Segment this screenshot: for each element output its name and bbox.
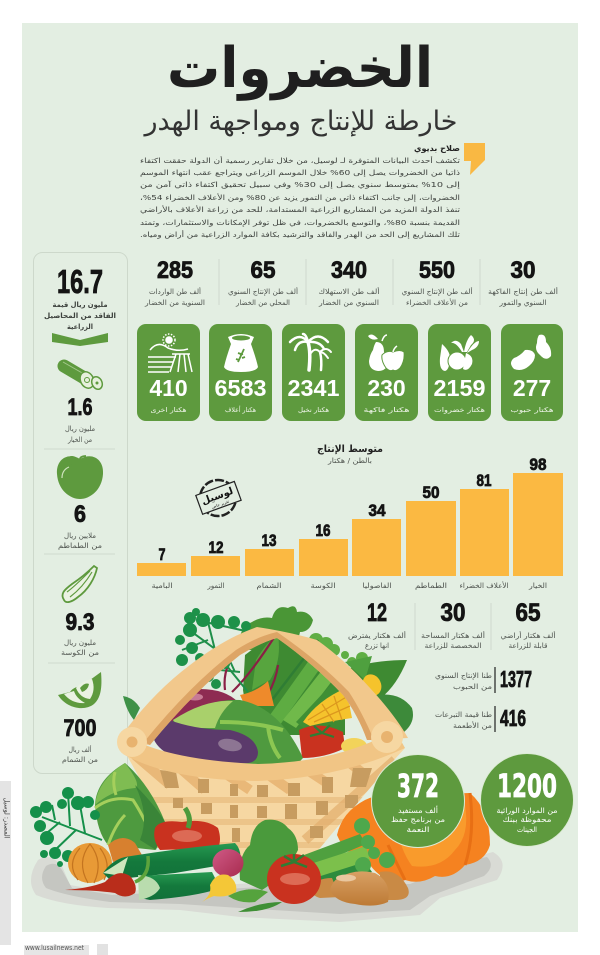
stat 30 land: ألف هكتار المساحة <box>421 631 485 640</box>
icon: melon slice <box>58 672 101 708</box>
stamp: Lusail logo <box>193 474 244 522</box>
body paragraph: الخضروات، إلى جانب اكتفاء ذاتي من التمور يزيد عن 80% ومن الأعلاف الخضراء 54%، <box>140 193 460 202</box>
card: fruit 230: هكتار فاكهة <box>364 406 410 414</box>
stat 6: ملايين ريال <box>64 532 96 540</box>
card: grains 277 <box>501 324 563 421</box>
bar labels: الطماطم <box>415 582 447 590</box>
celery <box>296 818 395 890</box>
icon: cucumber <box>63 362 104 391</box>
stat 30: ألف طن إنتاج الفاكهة <box>488 287 558 296</box>
bar values: 16 <box>316 521 330 540</box>
chart heading <box>317 444 383 465</box>
stat 65 land: 65 <box>516 599 541 627</box>
stat 340: 340 <box>331 257 367 284</box>
beet <box>167 689 238 725</box>
card: other 410 <box>137 324 200 421</box>
stamp: Lusail logo: تقرير خاص <box>211 499 230 510</box>
body paragraph: تلك المشاريع إلى الحد من الهدر والفاقد والترشيد بكافة الموارد الزراعية من أراض ومياه. <box>140 230 460 239</box>
card: palms 2341 <box>282 324 345 421</box>
callout: 372 beneficiaries: من برنامج حفظ <box>391 815 445 824</box>
chart heading: بالطن / هكتار <box>327 457 372 465</box>
callout: 372 beneficiaries: ألف مستفيد <box>398 805 438 815</box>
icon: zucchini <box>62 566 97 602</box>
chili <box>65 856 148 896</box>
byline: صلاح بديوي <box>414 144 460 153</box>
bar values: 7 <box>158 545 166 564</box>
bar labels: الكوسة <box>310 582 336 590</box>
intro text block <box>140 144 460 239</box>
card: palms 2341: 2341 <box>288 375 340 401</box>
icon: pear and apple <box>368 335 404 371</box>
stat 9.3: من الكوسة <box>61 649 99 657</box>
stat 9.3 <box>61 609 99 657</box>
front parsley <box>30 787 102 867</box>
total value 16.7: مليون ريال قيمة <box>52 301 108 309</box>
stat 30: 30 <box>510 257 536 284</box>
stat 9.3: 9.3 <box>66 609 94 636</box>
bar labels: الفاصوليا <box>362 582 392 590</box>
subtitle: خارطة للإنتاج ومواجهة الهدر <box>143 106 458 137</box>
stat 1.6: مليون ريال <box>65 425 95 433</box>
stat: 1377 grains: من الحبوب <box>453 683 492 691</box>
stat 340: ألف طن الاستهلاك <box>318 287 380 296</box>
basket body <box>125 748 405 860</box>
bar values: 81 <box>476 471 492 490</box>
pumpkin <box>337 793 490 882</box>
small left leaf <box>123 696 140 720</box>
second corn cob <box>359 671 385 699</box>
icon: tomato <box>57 456 103 499</box>
stat 30 <box>488 257 558 307</box>
right-hand leaves <box>345 656 413 732</box>
card: other 410: 410 <box>149 375 188 401</box>
stat: 1377 grains <box>435 666 532 693</box>
callout: 1200 genetic resources: 1200 <box>497 767 557 805</box>
stat 550: من الأعلاف الخضراء <box>406 298 468 307</box>
total value 16.7: الفاقد من المحاصيل <box>44 312 116 320</box>
icon: eggplant and turnip <box>440 335 479 371</box>
stamp: Lusail logo: لوسيل <box>200 486 235 507</box>
body paragraph: إلى 10% بمتوسط سنوي يصل إلى 30% وفي سبيل تحقيق اكتفاء ذاتي آمن من <box>140 180 460 189</box>
stat 1.6: 1.6 <box>68 394 92 421</box>
title: الخضروات <box>167 36 433 101</box>
card: fruit 230 <box>355 324 418 421</box>
bar labels: البامية <box>152 582 173 590</box>
stat 700: من الشمام <box>62 756 98 764</box>
callout: 1200 genetic resources: الجينات <box>517 825 537 834</box>
stat: 416 food donations: 416 <box>500 705 526 731</box>
cucumbers <box>103 843 240 900</box>
stat 1.6: من الخيار <box>67 436 92 444</box>
icon: orange quotation mark <box>464 143 485 175</box>
bar chart: average production <box>137 444 563 590</box>
basket rim <box>125 730 405 781</box>
stat 12 land <box>348 599 406 650</box>
onion <box>68 843 112 883</box>
basket hubs <box>117 721 403 757</box>
bar values: 98 <box>530 455 546 474</box>
bar values: 13 <box>262 531 276 550</box>
card: fruit 230: 230 <box>367 375 406 401</box>
bar values: 50 <box>422 483 440 502</box>
stat 12 land: 12 <box>367 599 387 627</box>
central greens <box>190 632 350 735</box>
stat 12 land: انها تزرع <box>365 642 389 650</box>
panel: crop value column <box>34 252 128 774</box>
basket tomato <box>299 725 345 758</box>
stat: 1377 grains: 1377 <box>500 666 532 692</box>
card: other 410: هكتار اخرى <box>150 406 187 414</box>
card: fodder 6583: هكتار أعلاف <box>225 405 257 414</box>
card: vegetables 2159: 2159 <box>434 375 486 401</box>
icon: farm <box>148 334 192 372</box>
total value 16.7: الزراعية <box>67 323 93 331</box>
footer website <box>24 944 108 955</box>
stat 9.3: مليون ريال <box>64 639 96 647</box>
stat 6 <box>58 501 102 550</box>
icon: palm trees <box>290 334 331 370</box>
stat 30 land: 30 <box>440 599 466 627</box>
bar labels: الأعلاف الخضراء <box>460 581 509 590</box>
stat 700 <box>62 715 98 764</box>
red pepper <box>154 808 220 850</box>
back lettuce <box>238 606 313 650</box>
stat 340: السنوي من الخضار <box>318 299 379 307</box>
icon: beans <box>511 335 551 370</box>
illustration: vegetable basket <box>30 606 503 922</box>
pea pods <box>228 889 282 912</box>
hectare cards row <box>137 324 563 421</box>
stat 65: ألف طن الإنتاج السنوي <box>228 287 298 296</box>
total value 16.7: 16.7 <box>57 263 103 300</box>
callout: 1200 genetic resources <box>480 754 574 846</box>
card: grains 277: 277 <box>513 375 551 401</box>
callout: 372 beneficiaries: 372 <box>397 767 439 805</box>
stat 65 land: قابلة للزراعة <box>508 642 548 650</box>
stat 550: ألف طن الإنتاج السنوي <box>402 287 473 296</box>
footer website: www.lusailnews.net <box>25 944 84 952</box>
stat 700: ألف ريال <box>68 745 92 754</box>
stat 550 <box>402 257 473 307</box>
stat 285 <box>144 257 205 307</box>
callout: 372 beneficiaries <box>372 754 464 848</box>
parsley in basket <box>175 608 251 672</box>
callout: 1200 genetic resources: من الموارد الوراثية <box>496 806 558 815</box>
card: vegetables 2159 <box>428 324 491 421</box>
stat 340 <box>318 257 380 307</box>
bars <box>137 473 563 576</box>
body paragraph: القديمة بنسبة 80%، والتوسع بالخضروات، في ظل توفر الإمكانات والاستثمارات، وتمتد <box>140 219 460 227</box>
bar values: 12 <box>208 538 224 557</box>
callout: 1200 genetic resources: محفوظة ببنك <box>502 815 552 824</box>
source strip <box>0 781 11 945</box>
front cabbage <box>95 763 165 850</box>
stat: 1377 grains: طنا الإنتاج السنوي <box>435 672 492 680</box>
orange root <box>108 838 142 862</box>
total value 16.7 <box>44 263 116 331</box>
stat 12 land: ألف هكتار يفترض <box>348 631 406 640</box>
stat: 416 food donations <box>435 705 526 732</box>
body paragraph: تنفذ الدولة المزيد من المشاريع الزراعية المستدامة، للحد من زراعة الأعلاف بالأراضي <box>140 205 460 214</box>
stat 285: 285 <box>157 257 193 284</box>
bar labels: التمور <box>207 582 225 590</box>
light-green parsley cluster <box>309 633 368 674</box>
basket handle <box>117 627 408 745</box>
bar labels <box>152 581 547 590</box>
radish <box>212 849 244 877</box>
carrot <box>240 681 274 706</box>
stat 6: 6 <box>74 501 86 528</box>
source strip: المصدر: لوسيل <box>2 798 10 839</box>
stat 285: ألف طن الواردات <box>149 287 201 296</box>
bar labels: الخيار <box>528 582 547 590</box>
bar values: 34 <box>368 501 386 520</box>
stat 1.6 <box>65 394 95 444</box>
top statistics row <box>144 257 558 307</box>
front lettuce <box>240 820 298 890</box>
cabbage in basket <box>173 700 303 772</box>
icon: sack <box>224 334 258 372</box>
card: vegetables 2159: هكتار خضروات <box>434 406 486 414</box>
stat 30: السنوي والتمور <box>498 299 547 307</box>
eggplant <box>152 712 258 763</box>
stat 65 land: ألف هكتار أراضي <box>500 631 556 640</box>
stat 700: 700 <box>64 715 96 742</box>
stat 285: السنوية من الخضار <box>144 299 205 307</box>
potatoes <box>312 871 409 906</box>
callout: 372 beneficiaries: النعمة <box>406 825 430 834</box>
stat 30 land <box>421 599 485 650</box>
card: palms 2341: هكتار نخيل <box>298 406 330 414</box>
stat: 416 food donations: من الأطعمة <box>453 721 492 730</box>
chart heading: متوسط الإنتاج <box>317 444 383 455</box>
bar labels: الشمام <box>256 582 282 590</box>
front tomato <box>267 854 321 904</box>
yellow turnip <box>202 874 236 902</box>
body paragraph: تكشف أحدث البيانات المتوفرة لـ لوسيل، من خلال تقارير رسمية أن الدولة حققت اكتفاء <box>140 156 460 165</box>
bar values <box>158 455 546 564</box>
stat: 416 food donations: طنا قيمة التبرعات <box>435 711 492 719</box>
body paragraph: ذاتيا من الخضروات يصل إلى 60% خلال الموسم الزراعي ويتراجع عقب انتهاء الموسم <box>140 169 460 177</box>
icon: green chevron <box>52 333 108 346</box>
stat 65 land <box>500 599 556 650</box>
card: fodder 6583 <box>209 324 272 421</box>
card: grains 277: هكتار حبوب <box>510 406 554 414</box>
land statistics row <box>348 599 556 650</box>
stat 6: من الطماطم <box>58 542 102 550</box>
body paragraph <box>140 156 460 239</box>
stat 550: 550 <box>419 257 455 284</box>
card: fodder 6583: 6583 <box>214 375 266 401</box>
stat 65: 65 <box>250 257 276 284</box>
stat 65 <box>228 257 298 307</box>
stat 65: المحلي من الخضار <box>235 299 290 307</box>
stat 30 land: المخصصة للزراعة <box>424 642 482 650</box>
yellow pepper <box>341 738 367 754</box>
corn <box>303 688 352 726</box>
ground shadow <box>31 852 503 922</box>
